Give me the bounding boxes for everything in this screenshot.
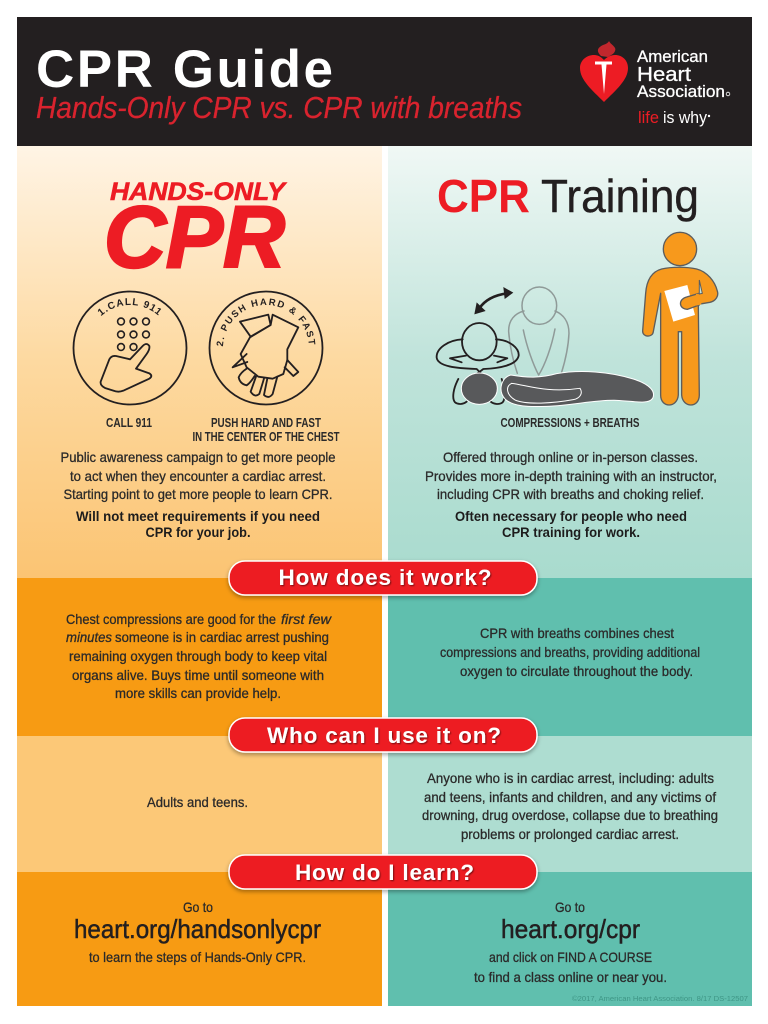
pill heading: How do I learn?: How do I learn? — [295, 860, 474, 885]
logo: American Heart Association: is why — [663, 108, 707, 127]
panel: learn CPR with breaths: and click on FIND A COURSE — [489, 949, 652, 965]
panel: CPR training intro — [388, 146, 752, 578]
label: push hard and fast — [192, 416, 340, 444]
text: hands-only warning: CPR for your job. — [146, 524, 250, 540]
text: CPR training description: Offered through online or in-person classes. — [443, 449, 698, 465]
copyright: ©2017, American Heart Association. 8/17 DS-12507 — [572, 995, 748, 1003]
label: call 911: CALL 911 — [106, 416, 152, 430]
heading: CPR Training: Training — [541, 170, 699, 222]
panel: learn hands-only: heart.org/handsonlycpr — [74, 914, 321, 944]
panel: how hands-only works — [17, 578, 382, 736]
heading: CPR Training: CPR — [437, 170, 530, 222]
pill heading: How do I learn? — [229, 855, 537, 889]
panel: learn CPR with breaths: Go to — [555, 899, 585, 915]
panel: CPR with breaths audience: Anyone who is in cardiac arrest, including: adults — [427, 770, 714, 786]
panel: how hands-only works: Chest compressions are good for the — [66, 611, 276, 627]
heading: Hands-Only CPR: CPR — [104, 189, 285, 286]
pill heading: How does it work?: How does it work? — [278, 565, 492, 590]
panel: learn CPR with breaths: heart.org/cpr — [501, 914, 640, 944]
text: hands-only warning: Will not meet requirements if you need — [76, 508, 320, 524]
icon: call 911 badge — [72, 290, 188, 406]
panel: how CPR with breaths works — [388, 578, 752, 736]
panel: learn hands-only — [17, 872, 382, 1006]
panel: how hands-only works: remaining oxygen through body to keep vital — [69, 648, 327, 664]
icon: push hard and fast badge — [208, 290, 324, 406]
panel: how hands-only works: first few — [281, 611, 332, 627]
text: hands-only warning — [76, 508, 320, 540]
panel: CPR with breaths audience: and teens, infants and children, and any victims of — [424, 789, 716, 805]
header banner — [17, 17, 752, 146]
pill heading: Who can I use it on? — [229, 718, 537, 752]
panel: hands-only audience: Adults and teens. — [147, 794, 248, 810]
panel: how hands-only works: someone is in cardiac arrest pushing — [115, 629, 329, 645]
logo: American Heart Association: Heart — [637, 64, 691, 86]
panel: how CPR with breaths works: compressions and breaths, providing additional — [440, 644, 700, 660]
subtitle: Hands-Only CPR vs. CPR with breaths — [36, 90, 522, 125]
label: push hard and fast: IN THE CENTER OF THE CHEST — [192, 430, 340, 444]
icon: push hard and fast badge: 2. PUSH HARD & FAST — [216, 298, 316, 346]
text: hands-only description: Public awareness campaign to get more people — [60, 449, 336, 465]
panel: how CPR with breaths works: CPR with breaths combines chest — [480, 625, 674, 641]
text: CPR training description — [425, 449, 717, 502]
panel: how hands-only works: more skills can provide help. — [115, 685, 281, 701]
panel: CPR with breaths audience: drowning, drug overdose, collapse due to breathing — [422, 807, 718, 823]
panel: CPR with breaths audience: problems or prolonged cardiac arrest. — [461, 826, 679, 842]
pill heading: How does it work? — [229, 561, 537, 595]
icon: heart and torch — [580, 41, 628, 102]
text: hands-only description: to act when they encounter a cardiac arrest. — [70, 468, 326, 484]
logo: American Heart Association — [580, 41, 730, 127]
panel: how CPR with breaths works: oxygen to circulate throughout the body. — [460, 663, 693, 679]
panel: learn hands-only: to learn the steps of Hands-Only CPR. — [89, 949, 306, 965]
text: CPR training requirement — [455, 508, 687, 540]
pill heading: Who can I use it on?: Who can I use it on? — [267, 723, 501, 748]
panel: hands-only intro — [17, 146, 382, 578]
panel: how hands-only works: minutes — [66, 629, 112, 645]
text: CPR training requirement: Often necessary for people who need — [455, 508, 687, 524]
icon: curved double arrow — [474, 287, 513, 314]
text: CPR training description: including CPR with breaths and choking relief. — [437, 486, 704, 502]
label: push hard and fast: PUSH HARD AND FAST — [211, 416, 321, 430]
illustration: rescuers, victim and instructor — [437, 232, 718, 407]
panel: hands-only audience — [17, 736, 382, 872]
logo: American Heart Association: American — [637, 48, 708, 66]
panel: learn hands-only: Go to — [183, 899, 213, 915]
text: CPR training requirement: CPR training for work. — [502, 524, 640, 540]
icon: victim lying down — [461, 371, 654, 407]
icon: call 911 badge: 1.CALL 911 — [98, 298, 162, 316]
title: CPR Guide — [36, 40, 333, 99]
logo: American Heart Association: Association — [637, 83, 725, 101]
logo: American Heart Association: life — [638, 108, 659, 127]
panel: how hands-only works: organs alive. Buys time until someone with — [72, 667, 324, 683]
icon: grey rescuer — [509, 287, 569, 375]
heading: Hands-Only CPR: HANDS-ONLY — [110, 178, 287, 206]
icon: orange instructor with clipboard — [643, 232, 718, 405]
text: CPR training description: Provides more in-depth training with an instructor, — [425, 468, 717, 484]
text: hands-only description — [60, 449, 336, 502]
icon: black rescuer — [437, 323, 519, 404]
text: hands-only description: Starting point to get more people to learn CPR. — [64, 486, 332, 502]
panel: learn CPR with breaths — [388, 872, 752, 1006]
heading: CPR Training — [437, 170, 699, 222]
label: compressions + breaths: COMPRESSIONS + BREATHS — [500, 416, 640, 430]
panel: learn CPR with breaths: to find a class online or near you. — [474, 969, 667, 985]
panel: CPR with breaths audience — [388, 736, 752, 872]
